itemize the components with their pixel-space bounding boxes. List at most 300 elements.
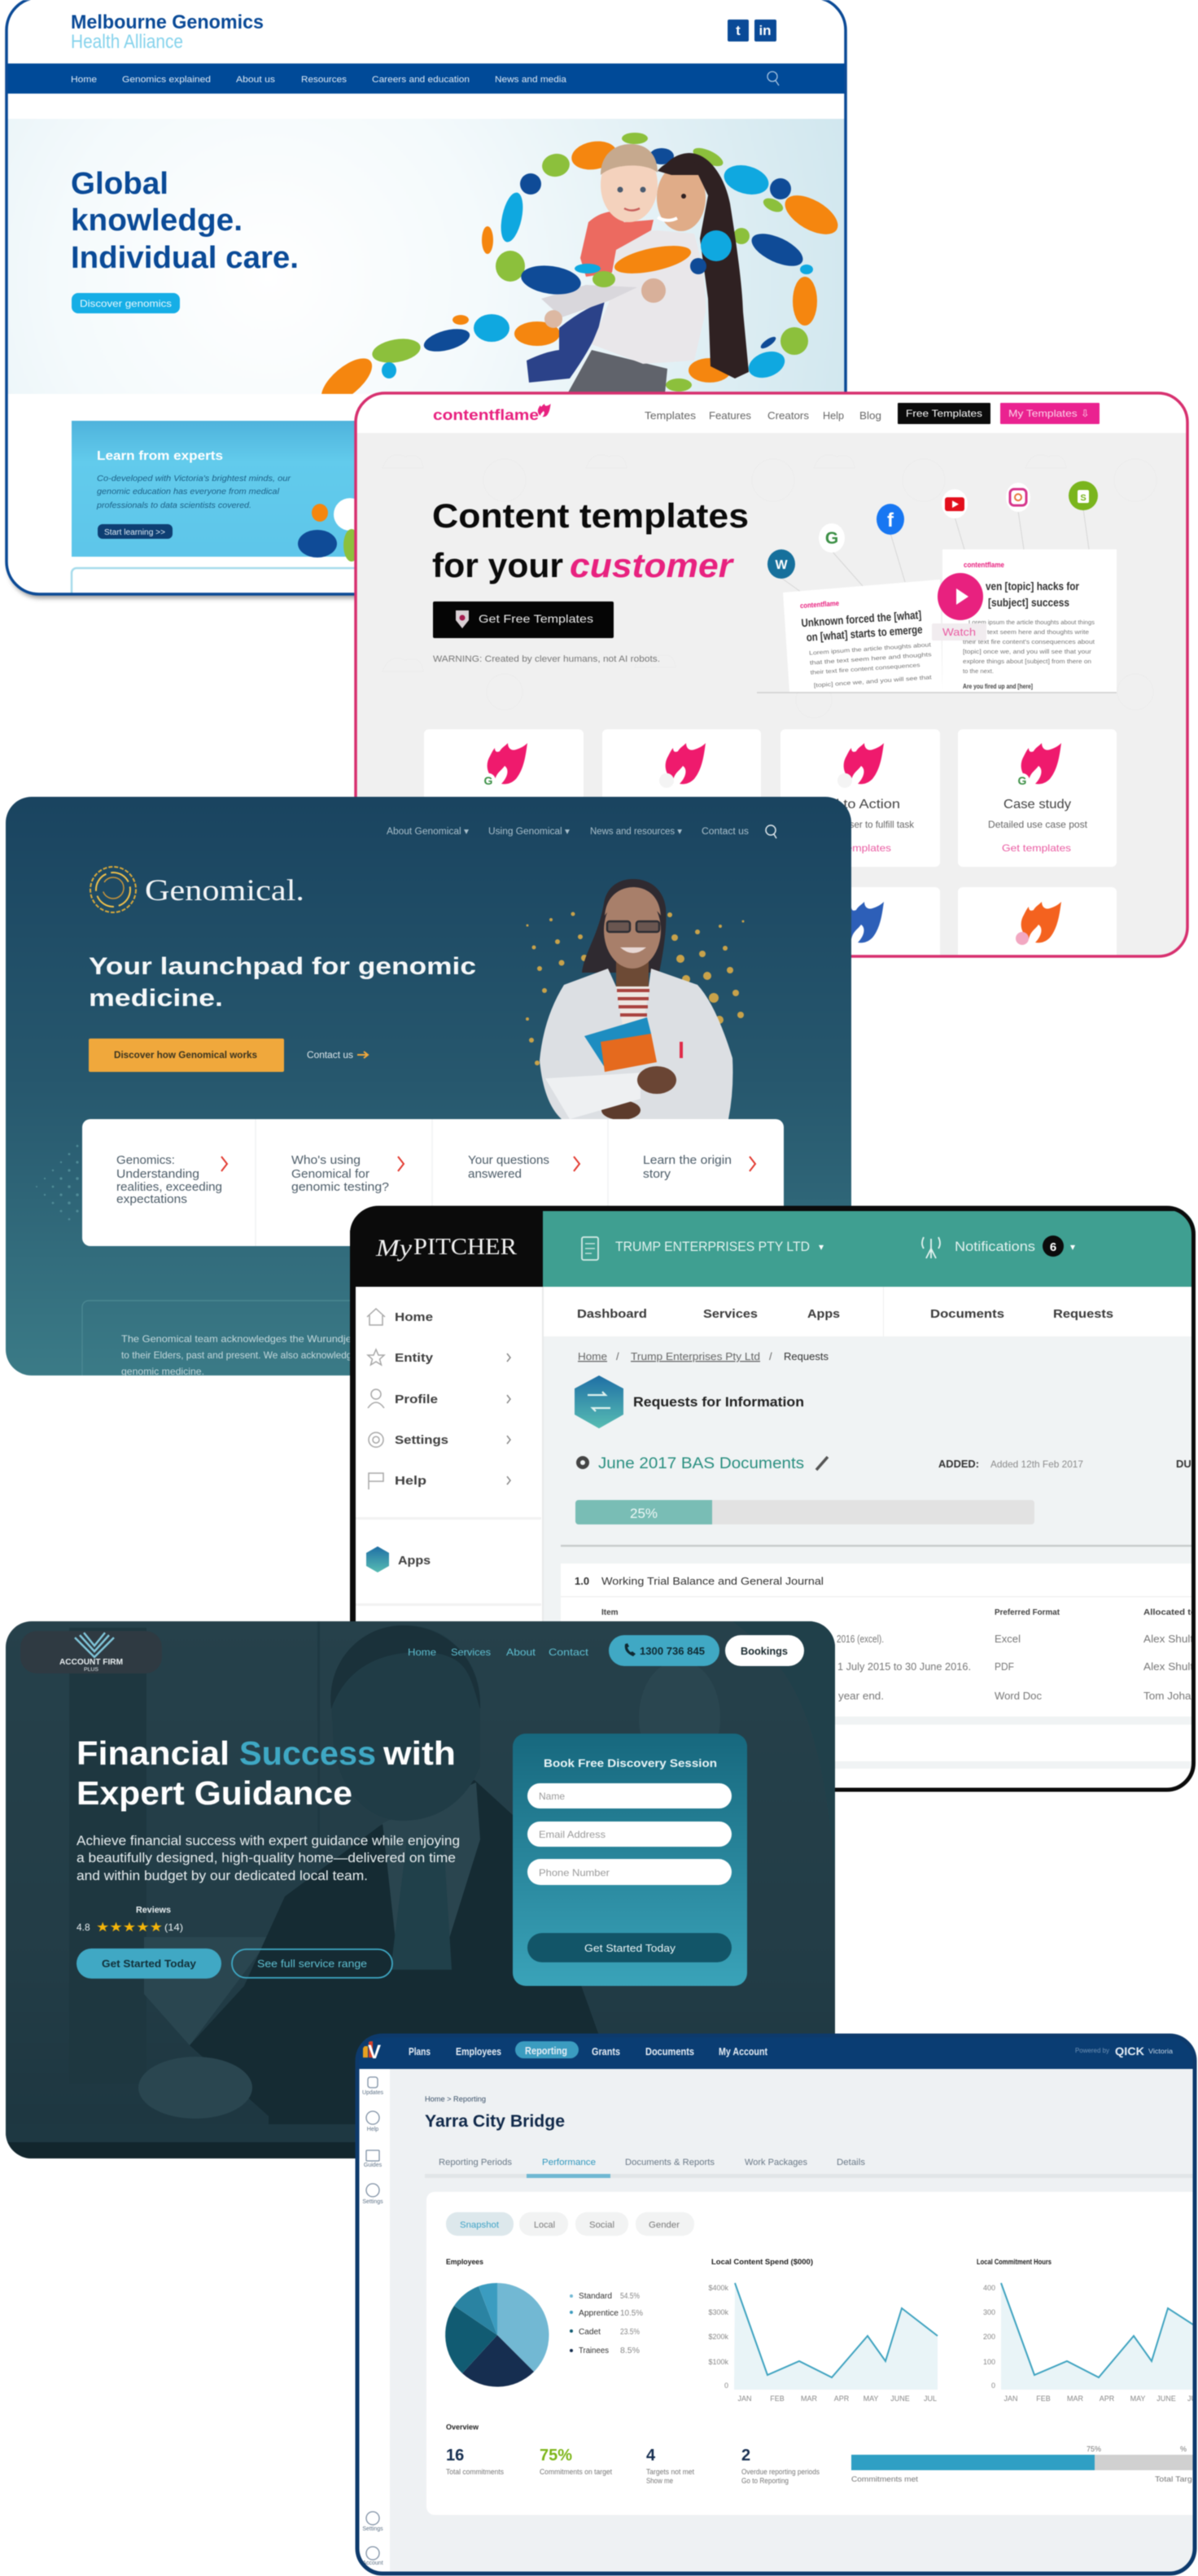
navigation bar [7, 63, 846, 94]
logo: Genomical [90, 867, 304, 912]
chart: local content spend: FEB [770, 2394, 785, 2403]
panel: project reporting dashboard [356, 2034, 1198, 2575]
icon: linkedin [754, 20, 776, 42]
navigation: News and resources ▾ [590, 827, 682, 837]
chart: local content spend: $400k [708, 2284, 728, 2292]
form: book free discovery session: Name [539, 1791, 565, 1802]
hero heading: customer [570, 546, 735, 584]
chart: employees pie: Apprentice [579, 2309, 619, 2318]
logo: Melbourne Genomics Health Alliance: Health Alliance [71, 31, 183, 53]
overview statistics: Targets not met [646, 2468, 694, 2476]
table: working trial balance: Alex Shultz [1143, 1661, 1198, 1673]
tabs: Work Packages [745, 2158, 808, 2167]
card: learn from experts: professionals to data scientists covered. [96, 501, 251, 510]
sidebar: Settings [395, 1433, 448, 1447]
form: book free discovery session: Phone Number [539, 1867, 610, 1878]
link: origin story: Learn the origin [643, 1153, 732, 1167]
navigation bar: News and media [495, 75, 567, 85]
link: who's using: Genomical for [291, 1167, 369, 1181]
tabs: Details [837, 2158, 866, 2167]
card: learn from experts [71, 420, 355, 562]
table: working trial balance: Alex Shultz [1143, 1634, 1198, 1645]
reviews rating: 4.8 [77, 1922, 90, 1933]
hero heading [432, 496, 749, 584]
left sidebar [356, 2069, 390, 2575]
header bar: ▾ [1070, 1241, 1075, 1253]
hero paragraph [77, 1833, 460, 1883]
connector lines [781, 509, 1089, 593]
tab bar: Requests [1053, 1307, 1113, 1321]
header bar [543, 1206, 1196, 1287]
card: performance [426, 2192, 1198, 2515]
filter pills [446, 2212, 694, 2236]
template preview cards: Are you fired up and [here] [963, 683, 1033, 690]
chart: local commitment hours: APR [1100, 2394, 1115, 2403]
card: learn from experts: Learn from experts [97, 449, 223, 463]
logo block [350, 1206, 543, 1287]
logo: Melbourne Genomics Health Alliance: Melbourne Genomics [71, 11, 264, 33]
hero heading: Financial [77, 1734, 230, 1772]
link: origin story [643, 1153, 755, 1181]
header bar: Help [823, 409, 844, 422]
link: who's using [291, 1153, 404, 1194]
top navigation: QICK [1115, 2045, 1144, 2058]
outlined box [70, 566, 355, 593]
button: discover genomics [72, 293, 180, 313]
template preview cards: Unknown forced the [what] [801, 608, 922, 629]
hero paragraph: a beautifully designed, high-quality home—delivered on time [77, 1850, 456, 1865]
left sidebar: Settings [362, 2199, 383, 2205]
header bar: Features [709, 409, 751, 422]
left sidebar: Guides [364, 2163, 383, 2168]
sidebar: Apps [398, 1554, 431, 1568]
chart: local commitment hours: 300 [983, 2308, 995, 2316]
header bar: Free Templates [906, 408, 982, 419]
chart: employees pie: Employees [446, 2258, 483, 2267]
template preview cards: their text fire content consequences [811, 663, 920, 676]
overview statistics: 2 [741, 2447, 750, 2464]
navigation: About [506, 1647, 536, 1658]
panel: Melbourne Genomics website [7, 0, 846, 617]
watch label: Watch [942, 626, 976, 638]
template card 4: case study: Detailed use case post [988, 819, 1088, 830]
template preview cards: on [what] starts to emerge [806, 623, 923, 644]
overview statistics: Total commitments [446, 2468, 504, 2476]
navigation bar: Resources [301, 75, 348, 85]
chart: local content spend: $200k [708, 2333, 728, 2341]
card: quick links [82, 1119, 784, 1246]
table: working trial balance: 1 July 2015 to 30 June 2016. [837, 1661, 971, 1673]
hero heading: medicine. [89, 985, 223, 1012]
left sidebar: Account [362, 2561, 383, 2566]
commitments progress bar: Total Targets [1155, 2475, 1198, 2483]
chart: local commitment hours: MAY [1130, 2394, 1145, 2403]
template card 7 [850, 887, 940, 955]
chart: local commitment hours: 200 [983, 2333, 995, 2341]
card: learn from experts: genomic education has everyone from medical [97, 487, 280, 496]
hero heading: Content templates [432, 496, 749, 535]
overview statistics: 16 [446, 2447, 464, 2464]
template card 3: call to action [780, 729, 940, 867]
table: working trial balance: 1.0 [575, 1575, 589, 1587]
button: bookings [725, 1635, 804, 1666]
panel: Account Firm website [6, 1621, 835, 2158]
panel: Genomical website [6, 797, 851, 1415]
button: discover genomics: Discover genomics [80, 298, 172, 309]
tabs: Documents & Reports [625, 2158, 715, 2167]
chart: employees pie: 54.5% [620, 2292, 640, 2301]
template preview cards: [subject] success [988, 596, 1069, 609]
form: book free discovery session [513, 1734, 747, 1986]
tabs [425, 2158, 1196, 2178]
template card 1 [424, 729, 584, 797]
document heading: June 2017 BAS Documents: DUE [1176, 1458, 1198, 1470]
reviews rating: Reviews [136, 1905, 171, 1915]
template preview cards: Lorem ipsum the article thoughts about things [968, 620, 1095, 626]
breadcrumb: Home [578, 1350, 607, 1362]
link: genomics realities: expectations [116, 1192, 187, 1206]
filter pills: Local [534, 2220, 555, 2230]
tabs: Performance [542, 2158, 596, 2167]
chart: local commitment hours: JUNE [1156, 2394, 1176, 2403]
table: working trial balance: Allocated to [1143, 1608, 1196, 1617]
progress bar: 25% [575, 1500, 1034, 1524]
template card 3: call to action: Persuade user to fulfill task [802, 819, 915, 830]
sidebar: Help [395, 1474, 426, 1488]
overview statistics: 75% [540, 2447, 572, 2464]
reviews rating [77, 1905, 183, 1935]
hero paragraph: and within budget by our dedicated local team. [77, 1868, 368, 1883]
template preview cards: [topic] once we, and you will see that your [963, 649, 1092, 655]
icon: instagram [1006, 483, 1030, 512]
navigation: Services [451, 1647, 491, 1658]
foreground blobs [519, 230, 732, 298]
chart: local commitment hours: Local Commitment Hours [977, 2258, 1052, 2267]
link: genomics realities: Genomics: [116, 1153, 175, 1167]
template preview cards: contentflame [800, 599, 839, 610]
top navigation: Employees [456, 2046, 501, 2058]
chart: employees pie: Trainees [579, 2346, 609, 2355]
template preview cards: [topic] once we, and you will see that [814, 675, 932, 689]
icon: linkedin: in [759, 23, 772, 38]
sidebar: Entity [395, 1351, 434, 1365]
overview statistics: Go to Reporting [741, 2477, 789, 2485]
button: discover: Discover how Genomical works [114, 1049, 257, 1061]
tab bar: Documents [930, 1307, 1004, 1321]
header bar: ▾ [819, 1241, 824, 1253]
chart: local content spend: $300k [708, 2308, 728, 2316]
link: genomics realities: realities, exceeding [116, 1180, 222, 1194]
card: learn from experts: Start learning >> [104, 528, 165, 537]
template preview cards: that the text seem here and thoughts write [963, 630, 1089, 636]
icon: facebook: f [887, 510, 894, 531]
section title: requests for information [575, 1375, 804, 1428]
gold dots [526, 912, 744, 1065]
header bar: My Templates ⇩ [1008, 408, 1090, 419]
template preview cards: that the text seem here and thoughts [810, 652, 933, 667]
template card 3: call to action: Call to Action [814, 798, 900, 811]
reviews rating: ★★★★★ [96, 1921, 163, 1935]
document heading: June 2017 BAS Documents: ADDED: [938, 1458, 979, 1470]
template card 1: G [484, 774, 493, 787]
hero heading [77, 1734, 456, 1812]
button: phone: 1300 736 845 [640, 1645, 705, 1657]
navigation [387, 825, 776, 838]
table: working trial balance: year end. [838, 1690, 884, 1702]
chart: employees pie: 8.5% [620, 2346, 640, 2355]
chart: local commitment hours: FEB [1036, 2394, 1051, 2403]
navigation bar: Careers and education [372, 75, 470, 85]
chart: local content spend: MAR [801, 2394, 817, 2403]
template preview cards: Lorem ipsum the article thoughts about [809, 642, 931, 657]
chart: employees pie [445, 2258, 643, 2387]
hero heading: with [383, 1734, 456, 1772]
table: working trial balance: Item [601, 1608, 619, 1617]
template card 4: case study: Get templates [1002, 842, 1071, 854]
sidebar: Home [395, 1310, 433, 1324]
table: working trial balance: 2016 (excel). [837, 1634, 884, 1645]
watch label [932, 623, 986, 641]
navigation: Home [408, 1647, 436, 1658]
table: working trial balance: Preferred Format [995, 1608, 1060, 1617]
template card 2 [602, 729, 761, 797]
form: book free discovery session: Get Started Today [584, 1942, 676, 1954]
top navigation: Reporting [525, 2045, 567, 2057]
header bar: Creators [767, 409, 809, 422]
hero heading: Expert Guidance [77, 1774, 352, 1812]
chart: local commitment hours: 400 [983, 2284, 995, 2292]
card: learn from experts: Co-developed with Victoria's brightest minds, our [97, 474, 291, 483]
left sidebar: Settings [362, 2526, 383, 2532]
filter pills: Social [589, 2220, 614, 2230]
table: working trial balance [561, 1564, 1198, 1793]
template preview cards [757, 549, 1117, 693]
hero heading: Global [71, 167, 168, 201]
button: get free templates [433, 601, 614, 638]
overview statistics: Overview [446, 2423, 479, 2432]
chart: local commitment hours: 0 [991, 2381, 995, 2390]
chart: local content spend: 0 [724, 2381, 728, 2390]
template preview cards: to the next. [963, 669, 994, 675]
link: who's using: genomic testing? [291, 1180, 389, 1194]
tabs: Reporting Periods [439, 2158, 512, 2167]
header bar: contentflame [433, 407, 539, 423]
left sidebar: Help [367, 2127, 378, 2132]
overview statistics: Overdue reporting periods [741, 2468, 820, 2476]
chart: local content spend: JUNE [890, 2394, 910, 2403]
hero heading: Success [239, 1734, 376, 1772]
navigation bar: Home [71, 75, 97, 85]
navigation: Using Genomical ▾ [488, 827, 570, 837]
breadcrumb: / [616, 1350, 619, 1362]
template card 8 [958, 887, 1117, 955]
genomic blob ring [314, 133, 844, 411]
hero heading: knowledge. [71, 203, 243, 238]
link: origin story: story [643, 1167, 671, 1181]
breadcrumb [578, 1350, 829, 1362]
top navigation: My Account [719, 2046, 768, 2058]
template preview cards: ven [topic] hacks for [986, 579, 1079, 593]
form: book free discovery session: Email Address [539, 1829, 606, 1840]
link: genomics realities [116, 1153, 227, 1206]
template card 4: case study [958, 729, 1117, 867]
hero heading [89, 953, 476, 1012]
button: get free templates: Get Free Templates [479, 612, 593, 625]
hero paragraph: Achieve financial success with expert guidance while enjoying [77, 1833, 460, 1848]
overview statistics: Show me [646, 2477, 673, 2485]
header bar: Templates [645, 409, 697, 422]
photo: mother and child [527, 144, 749, 394]
icon: shopify: S [1080, 493, 1087, 503]
hero heading: for your [432, 546, 563, 584]
table: working trial balance: Excel [995, 1634, 1021, 1645]
button: phone [609, 1635, 719, 1666]
breadcrumb: Trump Enterprises Pty Ltd [631, 1350, 760, 1362]
chart: local commitment hours: JAN [1003, 2394, 1018, 2403]
tab bar: Services [703, 1307, 758, 1321]
logo: Genomical: Genomical. [145, 874, 304, 908]
button: discover [89, 1039, 284, 1072]
left sidebar: Updates [362, 2090, 384, 2096]
button: see full service range [232, 1949, 392, 1978]
tab bar: Apps [807, 1307, 840, 1321]
reviews rating: (14) [164, 1922, 183, 1933]
top navigation: Victoria [1148, 2048, 1174, 2055]
breadcrumb: Home > Reporting [425, 2095, 486, 2103]
icon: twitter: t [736, 23, 741, 38]
play button [938, 573, 983, 620]
navigation [408, 1647, 589, 1658]
icon: google: G [825, 529, 838, 548]
chart: local content spend: MAY [864, 2394, 878, 2403]
icon: twitter [728, 20, 749, 42]
header bar: Blog [859, 409, 881, 422]
top navigation: Plans [409, 2046, 431, 2058]
template card 4: case study: G [1018, 774, 1027, 787]
commitments progress bar: Commitments met [851, 2475, 919, 2483]
filter pills: Snapshot [460, 2220, 499, 2230]
chart: local content spend: Local Content Spend ($000) [711, 2258, 813, 2267]
commitments progress bar: 75% [1087, 2445, 1101, 2453]
icon: wordpress [767, 549, 795, 579]
chart: employees pie: Standard [579, 2292, 612, 2301]
button: get started today: Get Started Today [102, 1957, 197, 1970]
header bar [356, 393, 1187, 433]
link: contact us: Contact us [307, 1051, 353, 1061]
document heading: June 2017 BAS Documents: June 2017 BAS Documents [598, 1455, 804, 1472]
dotted pattern [36, 1145, 79, 1220]
chart: employees pie: Cadet [579, 2328, 601, 2337]
acknowledgement box: genomic medicine. [121, 1366, 204, 1377]
icon: youtube [942, 489, 968, 518]
tab bar [544, 1287, 1196, 1336]
hero heading: Individual care. [71, 241, 299, 275]
acknowledgement box: to their Elders, past and present. We also acknowledge [121, 1349, 357, 1361]
navigation bar: About us [236, 75, 276, 85]
panel: MyPitcher dashboard [350, 1206, 1198, 1793]
icon: facebook [877, 504, 904, 535]
navigation: About Genomical ▾ [387, 827, 469, 837]
chart: local content spend: $100k [708, 2358, 728, 2366]
document heading: June 2017 BAS Documents: Added 12th Feb 2017 [990, 1459, 1083, 1470]
hero banner [7, 119, 846, 411]
top navigation: V [368, 2041, 381, 2063]
logo block: My [375, 1235, 413, 1262]
commitments progress bar [851, 2445, 1198, 2483]
button: see full service range: See full service range [257, 1957, 367, 1970]
navigation: Contact [549, 1647, 589, 1658]
chart: local content spend [708, 2258, 938, 2403]
template preview cards: contentflame [964, 561, 1004, 569]
link: your questions: Your questions [468, 1153, 549, 1167]
acknowledgement box: The Genomical team acknowledges the Wurundjeri [121, 1333, 357, 1345]
chart: local content spend: APR [834, 2394, 850, 2403]
chart: employees pie: 10.5% [620, 2309, 643, 2318]
note text: WARNING: Created by clever humans, not AI robots. [433, 654, 660, 664]
table: working trial balance: Word Doc [995, 1690, 1042, 1702]
chart: local commitment hours: MAR [1067, 2394, 1084, 2403]
template card 4: case study: Case study [1003, 798, 1071, 811]
overview statistics: 4 [646, 2447, 656, 2464]
progress bar: 25%: 25% [630, 1506, 658, 1521]
chart: local content spend: JAN [737, 2394, 752, 2403]
link: who's using: Who's using [291, 1153, 361, 1167]
header bar: TRUMP ENTERPRISES PTY LTD [615, 1239, 810, 1254]
navigation bar: Genomics explained [122, 75, 211, 85]
link: genomics realities: Understanding [116, 1167, 199, 1181]
template card 3: call to action: Get templates [822, 842, 891, 854]
sidebar [350, 1206, 544, 1629]
commitments progress bar: % [1180, 2445, 1187, 2453]
logo: Account Firm [20, 1631, 162, 1673]
hero heading [71, 167, 299, 275]
sidebar: Profile [395, 1393, 438, 1406]
chart: local content spend: JUL [924, 2394, 937, 2403]
top navigation [356, 2034, 1196, 2069]
page title: Yarra City Bridge [425, 2112, 565, 2131]
icon: shopify [1069, 481, 1098, 510]
button: bookings: Bookings [741, 1645, 788, 1657]
header bar: Notifications [955, 1239, 1035, 1254]
form: book free discovery session: Book Free Discovery Session [544, 1756, 717, 1769]
breadcrumb: / [769, 1350, 772, 1362]
navigation: Contact us [702, 827, 749, 837]
logo: Account Firm: PLUS [84, 1668, 98, 1673]
template preview cards: their text fire content's consequences about [963, 640, 1095, 645]
link: your questions [468, 1153, 579, 1181]
top navigation: Documents [645, 2046, 694, 2058]
table: working trial balance: PDF [995, 1661, 1014, 1673]
overview statistics: Commitments on target [540, 2468, 612, 2476]
panel: Content Flame website [356, 393, 1187, 969]
chart: local commitment hours: 100 [983, 2358, 995, 2366]
logo: Melbourne Genomics Health Alliance [72, 13, 264, 49]
hero heading: Your launchpad for genomic [89, 953, 476, 980]
table: working trial balance: Tom Johan [1143, 1690, 1197, 1702]
logo block: PITCHER [413, 1235, 517, 1260]
logo: Account Firm: ACCOUNT FIRM [59, 1658, 123, 1667]
overview statistics [446, 2423, 820, 2485]
photo: woman in lab coat [540, 879, 732, 1120]
icon: wordpress: W [775, 558, 788, 572]
link: your questions: answered [468, 1167, 522, 1181]
template preview cards: explore things about [subject] from there on [963, 659, 1091, 665]
chart: employees pie: 23.5% [620, 2328, 640, 2337]
top navigation: Grants [592, 2046, 620, 2058]
icon: google [819, 523, 845, 553]
tab bar: Dashboard [577, 1307, 647, 1321]
table: working trial balance: Working Trial Balance and General Journal [601, 1575, 824, 1587]
